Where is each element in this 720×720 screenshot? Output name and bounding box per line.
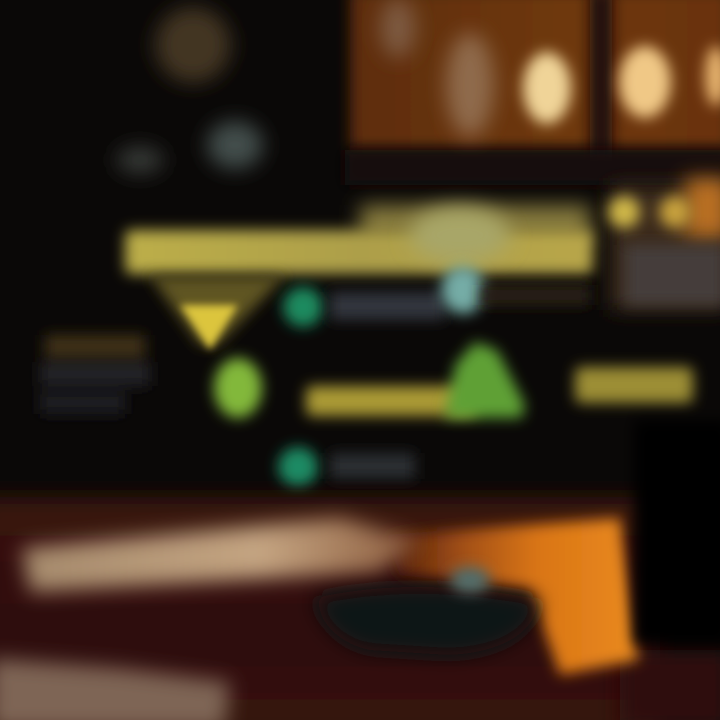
panel: right middle shelf [608,178,720,310]
panel: black right block [634,420,720,645]
panel: bottom left strip [0,658,230,720]
icon: bowl highlight [450,567,490,593]
icon: yellow funnel [150,276,285,350]
icon: round wall emblem [155,7,231,83]
panel: table [0,497,720,720]
text block: brown row [480,285,590,305]
text block: row two [330,453,415,479]
chart: yellow bar with green mound [306,342,525,418]
icon: gray wall blobs [116,121,263,174]
panel: beige strip [22,518,420,592]
text block: left labels [40,335,150,414]
light: glow 2 [619,46,671,118]
icon: green circle [214,358,262,418]
light: glow 1 [523,52,571,124]
panel: orange block [385,518,638,675]
text block: row one [330,292,445,320]
panel: shelves top right [345,0,720,185]
icon: teal dot row two [278,447,318,487]
callout: yellow label [575,367,693,403]
icon: light blue blob [441,266,485,314]
heading: yellow bar [125,205,593,274]
light: glow 3 [705,46,720,106]
icon: dark bowl [315,587,540,655]
icon: teal dot row one [283,287,323,327]
